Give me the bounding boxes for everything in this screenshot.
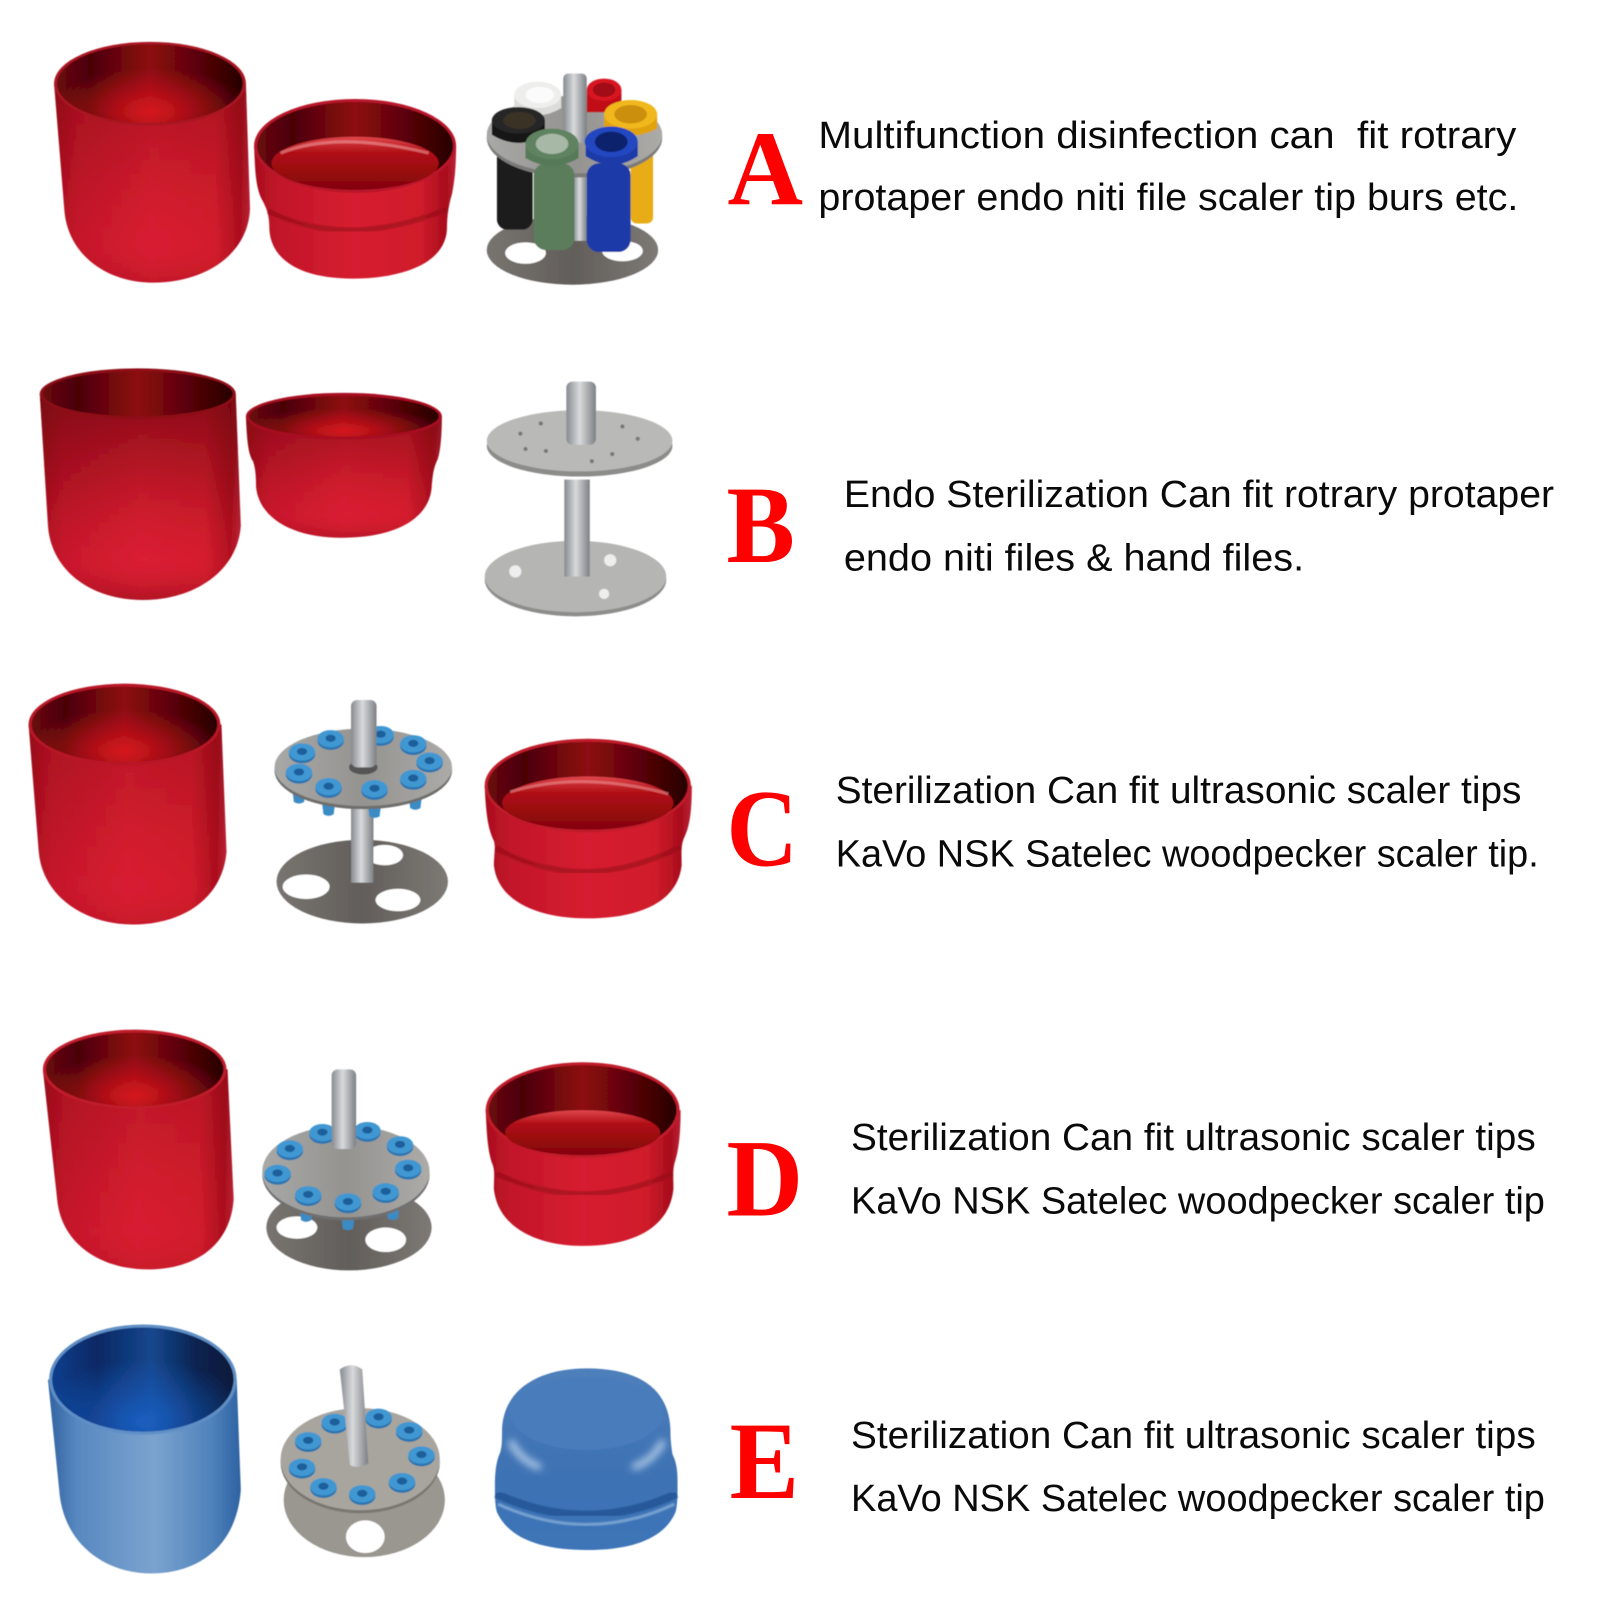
product row D xyxy=(43,1030,681,1270)
rack E with blue tips xyxy=(281,1365,445,1557)
letter B: B xyxy=(727,464,795,586)
letter C: C xyxy=(727,767,798,889)
letter D: D xyxy=(727,1117,803,1239)
product row E xyxy=(48,1324,678,1573)
can B lid cup xyxy=(246,393,442,538)
rack C with blue tips xyxy=(274,700,452,923)
can A tall body xyxy=(54,42,250,283)
product row A xyxy=(54,42,662,285)
description B: endo niti files & hand files. xyxy=(844,536,1304,578)
description C: KaVo NSK Satelec woodpecker scaler tip. xyxy=(836,832,1539,874)
rack B silver discs xyxy=(485,382,672,616)
description B: Endo Sterilization Can fit rotrary protaper xyxy=(844,473,1554,515)
can D tall body xyxy=(43,1030,234,1269)
can E tall blue body xyxy=(48,1324,241,1573)
can A lid cup xyxy=(254,99,456,279)
description E: Sterilization Can fit ultrasonic scaler tips xyxy=(851,1414,1536,1456)
description B xyxy=(844,473,1554,578)
letter A: A xyxy=(728,109,803,227)
can C lid cup xyxy=(485,739,692,918)
product row C xyxy=(29,684,692,924)
description E: KaVo NSK Satelec woodpecker scaler tip xyxy=(851,1477,1545,1519)
can C tall body xyxy=(29,684,227,924)
rack D with blue tips xyxy=(262,1069,432,1270)
product row B xyxy=(40,368,672,616)
rack A with coloured tubes xyxy=(487,73,662,285)
can E closed lid xyxy=(495,1368,678,1550)
description D: Sterilization Can fit ultrasonic scaler tips xyxy=(851,1116,1536,1158)
can B tall body xyxy=(40,368,241,600)
can D lid cup xyxy=(486,1062,681,1246)
description A xyxy=(818,114,1518,218)
description D xyxy=(851,1116,1545,1221)
description D: KaVo NSK Satelec woodpecker scaler tip xyxy=(851,1179,1545,1221)
description A: protaper endo niti file scaler tip burs etc. xyxy=(818,176,1518,218)
description C xyxy=(836,769,1539,874)
description E xyxy=(851,1414,1545,1519)
description A: Multifunction disinfection can fit rotrary xyxy=(818,114,1516,156)
description C: Sterilization Can fit ultrasonic scaler tips xyxy=(836,769,1521,811)
letter E: E xyxy=(730,1400,799,1522)
